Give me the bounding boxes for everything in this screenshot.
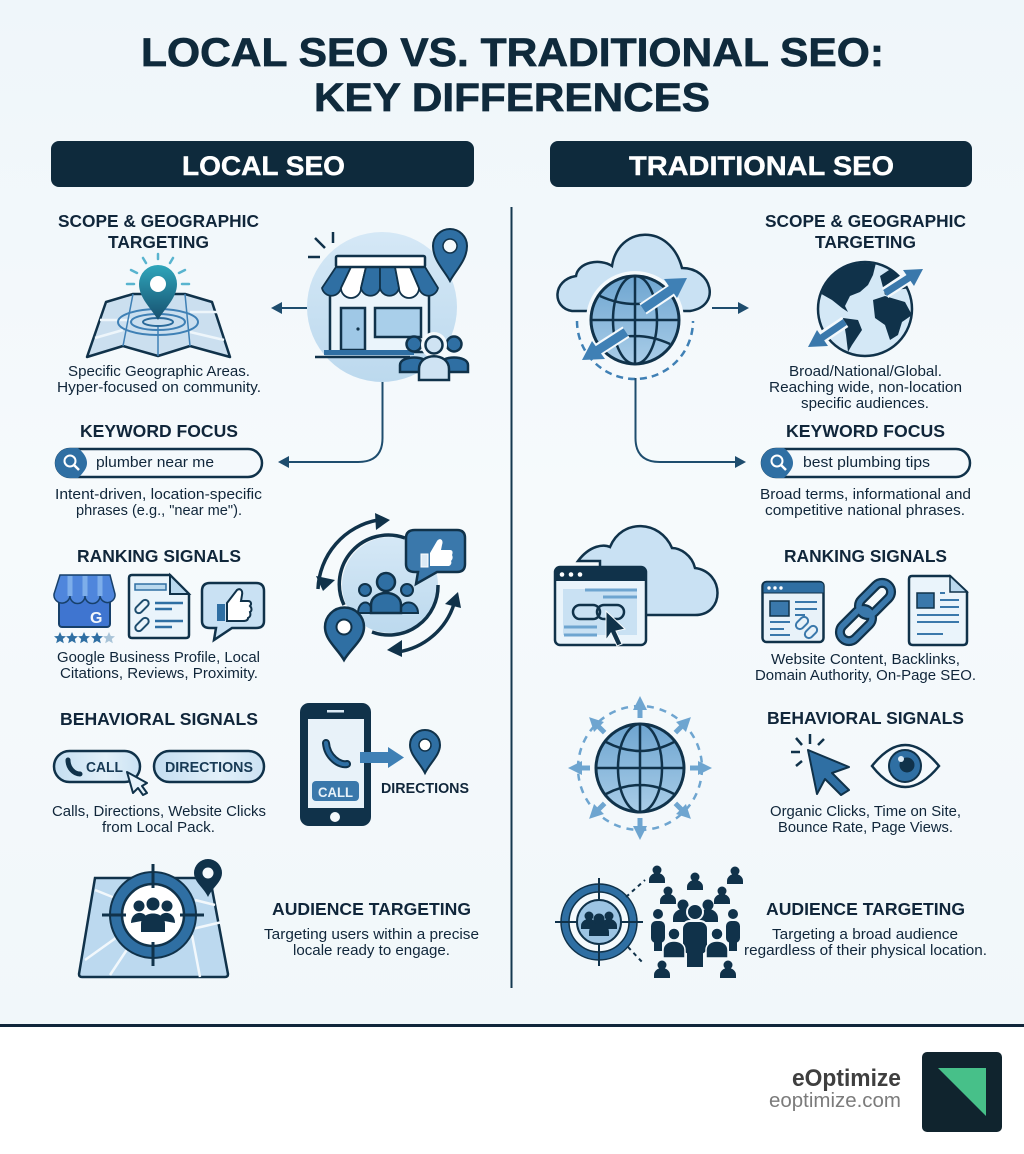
panel: traditional audience targeting: AUDIENCE TARGETING bbox=[766, 899, 965, 919]
panel: local behavioral signals: from Local Pack. bbox=[102, 820, 215, 836]
panel: local behavioral signals: Calls, Directions, Website Clicks bbox=[52, 804, 266, 820]
panel: local keyword: phrases (e.g., "near me"). bbox=[76, 503, 242, 519]
arrow: cloud to earth bbox=[712, 302, 749, 314]
panel: traditional behavioral signals bbox=[767, 708, 964, 836]
icon: phone call to directions: DIRECTIONS bbox=[381, 781, 469, 797]
panel: local ranking signals bbox=[57, 546, 260, 682]
search bar: plumber near me: plumber near me bbox=[96, 454, 214, 471]
panel: traditional scope text bbox=[765, 211, 966, 412]
panel: local scope text: SCOPE & GEOGRAPHIC bbox=[58, 211, 259, 231]
footer rule bbox=[0, 1024, 1024, 1027]
icon: reviews thumbs up bbox=[202, 583, 264, 640]
panel: local keyword bbox=[55, 421, 262, 519]
panel: traditional audience targeting: regardless of their physical location. bbox=[744, 943, 987, 959]
heading: Local SEO: LOCAL SEO bbox=[182, 151, 345, 181]
panel: local keyword: KEYWORD FOCUS bbox=[80, 421, 238, 441]
heading: Local SEO bbox=[51, 141, 474, 187]
icon: local storefront bbox=[307, 229, 468, 382]
panel: local scope text: Specific Geographic Areas. bbox=[68, 364, 250, 380]
panel: local scope text: Hyper-focused on community. bbox=[57, 380, 261, 396]
icon: phone call to directions: CALL bbox=[318, 784, 353, 800]
button: directions bbox=[154, 751, 264, 782]
panel: traditional ranking signals: Website Content, Backlinks, bbox=[771, 652, 960, 668]
panel: traditional keyword bbox=[760, 421, 971, 519]
icon: community cycle bbox=[316, 513, 465, 660]
search bar: plumber near me bbox=[55, 448, 262, 478]
panel: traditional audience targeting: Targeting a broad audience bbox=[772, 927, 958, 943]
panel: local ranking signals: Citations, Reviews, Proximity. bbox=[60, 666, 258, 682]
panel: traditional scope text: SCOPE & GEOGRAPHIC bbox=[765, 211, 966, 231]
icon: website content bbox=[762, 582, 824, 642]
panel: local audience targeting: locale ready to engage. bbox=[293, 943, 450, 959]
panel: traditional ranking signals: Domain Authority, On-Page SEO. bbox=[755, 668, 976, 684]
icon: target with small audience bbox=[555, 878, 645, 966]
panel: local ranking signals: RANKING SIGNALS bbox=[77, 546, 241, 566]
panel: local scope text: TARGETING bbox=[108, 232, 209, 252]
arrow: store to keyword bbox=[278, 382, 382, 468]
panel: traditional scope text: TARGETING bbox=[815, 232, 916, 252]
footer brand text: eoptimize.com bbox=[769, 1089, 901, 1112]
title bbox=[141, 31, 884, 120]
panel: traditional scope text: Reaching wide, non-location bbox=[769, 380, 962, 396]
panel: local audience targeting bbox=[264, 899, 479, 959]
panel: local scope text bbox=[57, 211, 261, 396]
icon: google business profile: G bbox=[90, 610, 102, 627]
icon: cloud with globe bbox=[557, 235, 710, 379]
icon: eye bbox=[872, 745, 939, 787]
icon: citations document bbox=[129, 575, 189, 638]
panel: traditional keyword: competitive national phrases. bbox=[765, 503, 965, 519]
panel: traditional keyword: Broad terms, informational and bbox=[760, 487, 971, 503]
panel: local behavioral signals: BEHAVIORAL SIGNALS bbox=[60, 709, 258, 729]
panel: traditional ranking signals: RANKING SIGNALS bbox=[784, 546, 947, 566]
heading: Traditional SEO bbox=[550, 141, 972, 187]
footer brand text bbox=[769, 1065, 901, 1112]
icon: crowd bbox=[649, 866, 743, 978]
footer brand text: eOptimize bbox=[792, 1065, 901, 1092]
panel: traditional ranking signals bbox=[755, 546, 976, 684]
heading: Traditional SEO: TRADITIONAL SEO bbox=[629, 151, 894, 181]
title: LOCAL SEO VS. TRADITIONAL SEO: bbox=[141, 31, 884, 75]
icon: earth with arrows bbox=[808, 262, 923, 356]
button: call bbox=[54, 751, 147, 795]
column divider bbox=[510, 207, 512, 988]
icon: click cursor bbox=[791, 734, 849, 795]
icon: phone call to directions bbox=[300, 703, 469, 826]
panel: traditional behavioral signals: Organic Clicks, Time on Site, bbox=[770, 804, 961, 820]
panel: traditional keyword: KEYWORD FOCUS bbox=[786, 421, 945, 441]
panel: local audience targeting: Targeting users within a precise bbox=[264, 927, 479, 943]
panel: traditional audience targeting bbox=[744, 899, 987, 959]
arrow: cloud to keyword bbox=[636, 378, 746, 468]
icon: target over local map bbox=[79, 859, 228, 977]
panel: local keyword: Intent-driven, location-specific bbox=[55, 487, 262, 503]
icon: cloud with browser link bbox=[555, 526, 718, 646]
title: KEY DIFFERENCES bbox=[314, 76, 710, 120]
icon: on-page document bbox=[909, 576, 967, 645]
panel: traditional scope text: Broad/National/Global. bbox=[789, 364, 942, 380]
panel: traditional behavioral signals: BEHAVIORAL SIGNALS bbox=[767, 708, 964, 728]
panel: local behavioral signals bbox=[52, 709, 266, 836]
logo bbox=[922, 1052, 1002, 1132]
search bar: best plumbing tips bbox=[761, 448, 970, 478]
panel: local audience targeting: AUDIENCE TARGETING bbox=[272, 899, 471, 919]
panel: local ranking signals: Google Business Profile, Local bbox=[57, 650, 260, 666]
icon: map with pin bbox=[87, 254, 230, 357]
panel: traditional behavioral signals: Bounce Rate, Page Views. bbox=[778, 820, 953, 836]
panel: traditional scope text: specific audiences. bbox=[801, 396, 929, 412]
icon: google business profile bbox=[54, 575, 115, 643]
arrow: store to map bbox=[271, 302, 307, 314]
search bar: best plumbing tips: best plumbing tips bbox=[803, 454, 930, 471]
button: call: CALL bbox=[86, 760, 123, 776]
button: directions: DIRECTIONS bbox=[165, 760, 253, 776]
icon: globe with outward arrows bbox=[568, 696, 712, 840]
icon: backlink chain bbox=[836, 579, 895, 645]
